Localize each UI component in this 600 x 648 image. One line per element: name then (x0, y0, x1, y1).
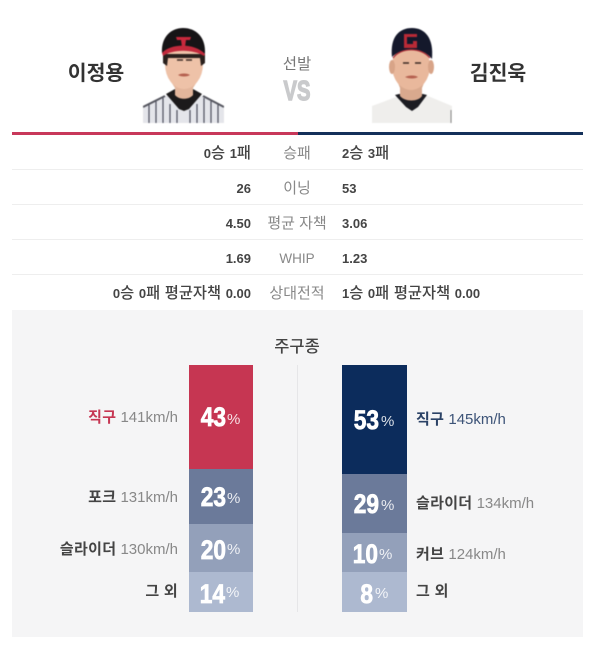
bar: 커브 10% (342, 533, 407, 572)
stat row: 평균 자책: 3.06 (342, 216, 367, 231)
stat row: WHIP (226, 251, 367, 266)
stat row: 승패 (204, 145, 389, 162)
label: 그 외: 그 외 (145, 583, 178, 600)
bar: 직구 53%: 53 (354, 405, 379, 435)
bar: 직구 53%: % (381, 413, 394, 430)
matchup label: 선발 (283, 56, 311, 73)
bar: 커브 10%: 10 (353, 539, 378, 569)
panel heading: 주구종 (274, 338, 320, 356)
stat row: WHIP: 1.23 (342, 251, 367, 266)
icon: right pitcher portrait (372, 27, 452, 124)
label: 직구: 직구 141km/h (88, 409, 178, 426)
stat row: 평균 자책 (226, 215, 367, 232)
stat row: 상대전적: 1승 0패 평균자책 0.00 (342, 285, 480, 302)
bar: 슬라이더 29% (342, 474, 407, 533)
stat row: WHIP: 1.69 (226, 251, 251, 266)
bar: 그 외 8%: 8 (360, 579, 373, 609)
label: 그 외: 그 외 (416, 583, 449, 600)
bar: 그 외 14% (189, 572, 253, 612)
bar: 직구 43%: 43 (201, 402, 226, 432)
bar: 직구 43%: % (227, 411, 240, 428)
left pitch chart (60, 365, 253, 612)
bar: 포크 23% (189, 469, 253, 524)
panel: pitch types (12, 310, 583, 637)
label: 포크: 포크 131km/h (88, 489, 178, 506)
stat row: 평균 자책: 평균 자책 (267, 215, 327, 232)
bar: 슬라이더 29%: % (381, 497, 394, 514)
label: 슬라이더: 슬라이더 134km/h (416, 495, 534, 512)
stat row: 상대전적: 상대전적 (269, 285, 325, 302)
right pitcher name: 김진욱 (470, 62, 526, 85)
stat row: 승패: 2승 3패 (342, 145, 389, 162)
bar: 포크 23%: % (227, 490, 240, 507)
bar: 포크 23%: 23 (201, 482, 226, 512)
bar: 슬라이더 20%: 20 (201, 535, 226, 565)
stat row: 평균 자책: 4.50 (226, 216, 251, 231)
bar: 그 외 8% (342, 572, 407, 612)
stat row: 이닝: 53 (342, 181, 356, 196)
bar: 슬라이더 20%: % (227, 541, 240, 558)
bar: 직구 53% (342, 365, 407, 474)
label: 직구: 직구 145km/h (416, 411, 506, 428)
stat row: 이닝 (236, 180, 356, 197)
bar: 커브 10%: % (379, 546, 392, 563)
bar: 슬라이더 29%: 29 (354, 489, 379, 519)
left pitcher name: 이정용 (68, 62, 124, 85)
stat row: 승패: 승패 (283, 145, 311, 162)
bar: 그 외 14%: 14 (200, 579, 225, 609)
bar: 그 외 8%: % (375, 585, 388, 602)
stat row: WHIP: WHIP (279, 251, 315, 266)
right pitch chart (342, 365, 534, 612)
bar: 직구 43% (189, 365, 253, 469)
team color divider (12, 132, 583, 135)
bar: 그 외 14%: % (226, 584, 239, 601)
stat row: 이닝: 26 (237, 181, 251, 196)
stat row: 상대전적 (113, 285, 480, 302)
bar: 슬라이더 20% (189, 524, 253, 572)
VS mark: VS (284, 75, 310, 106)
stat row: 승패: 0승 1패 (204, 145, 251, 162)
stat row: 이닝: 이닝 (283, 180, 311, 197)
stat row: 상대전적: 0승 0패 평균자책 0.00 (113, 285, 251, 302)
icon: left pitcher portrait (142, 27, 225, 124)
label: 슬라이더: 슬라이더 130km/h (60, 541, 178, 558)
label: 커브: 커브 124km/h (416, 546, 506, 563)
